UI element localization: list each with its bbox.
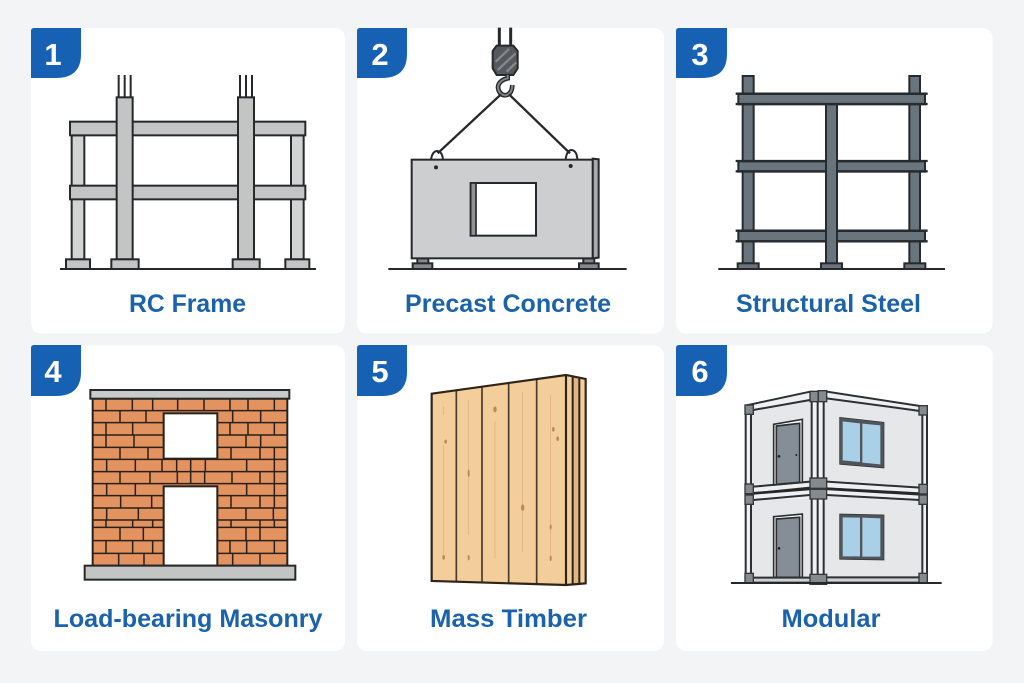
panel: RC Frame <box>31 28 345 334</box>
number badge 2 <box>357 28 407 78</box>
panel: Precast Concrete <box>357 28 664 334</box>
illustration: brick wall <box>85 390 295 580</box>
number badge 6: 6 <box>691 354 709 389</box>
label: RC Frame: RC Frame <box>129 290 246 318</box>
card background <box>357 346 664 651</box>
number badge 4: 4 <box>44 354 62 389</box>
number badge 1: 1 <box>44 37 62 72</box>
number badge 6 <box>676 345 727 396</box>
label: Precast Concrete: Precast Concrete <box>405 290 611 318</box>
number badge 3 <box>676 28 727 78</box>
label: Load-bearing Masonry: Load-bearing Masonry <box>54 605 323 633</box>
number badge 5 <box>357 345 407 396</box>
illustration: cross-laminated timber panel <box>432 375 586 585</box>
panel: Modular <box>676 345 992 651</box>
panel: Mass Timber <box>357 345 664 651</box>
card background <box>31 28 345 334</box>
number badge 3: 3 <box>691 37 709 72</box>
illustration: stacked modular units <box>731 391 942 584</box>
panel: Structural Steel <box>676 28 992 334</box>
number badge 2: 2 <box>371 37 389 72</box>
number badge 4 <box>31 345 81 396</box>
number badge 1 <box>31 28 81 78</box>
label: Structural Steel: Structural Steel <box>736 290 921 318</box>
panel: Load-bearing Masonry <box>31 345 345 651</box>
number badge 5: 5 <box>371 354 389 389</box>
illustration: steel frame <box>718 76 945 269</box>
illustration: reinforced concrete frame <box>60 75 316 269</box>
card background <box>357 28 664 334</box>
card background <box>676 28 992 334</box>
label: Modular: Modular <box>782 605 881 633</box>
illustration: crane lifting precast panel <box>388 28 627 269</box>
label: Mass Timber: Mass Timber <box>430 605 587 633</box>
card background <box>676 346 992 651</box>
card background <box>31 346 345 651</box>
